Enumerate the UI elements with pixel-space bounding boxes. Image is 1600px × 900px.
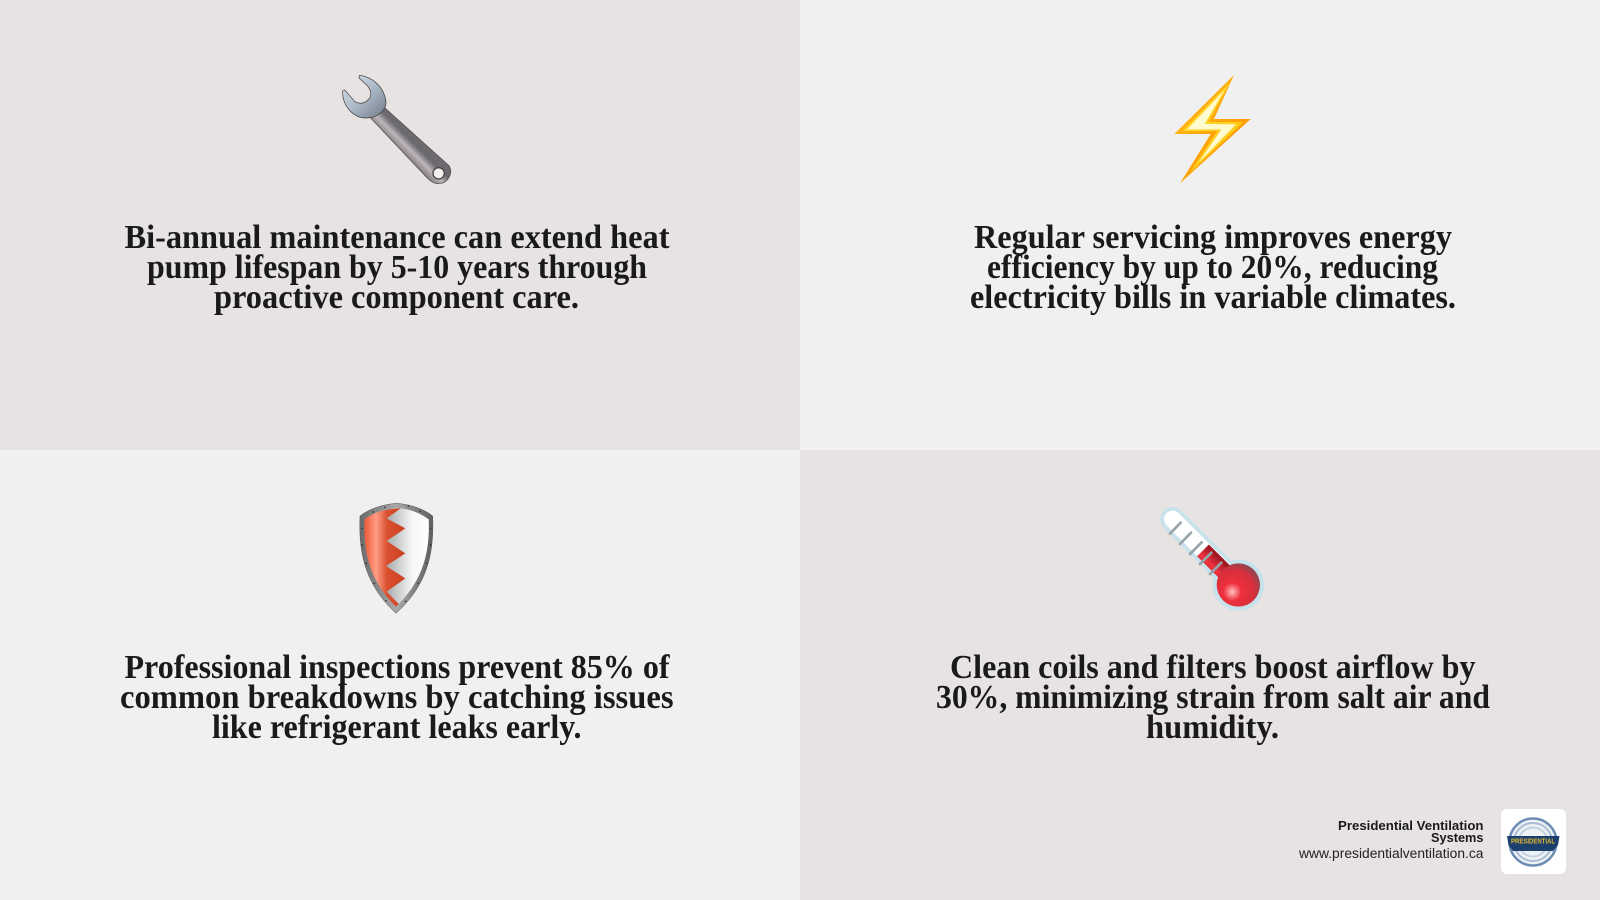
icon: shield	[360, 503, 433, 613]
logo badge: PRESIDENTIAL	[1511, 838, 1556, 846]
panel: professional inspections	[0, 450, 800, 900]
heading: professional inspections: like refrigerant leaks early.	[212, 709, 582, 746]
heading: maintenance lifespan: proactive component care.	[214, 279, 579, 316]
icon: wrench	[343, 75, 451, 184]
panel: coils and filters	[800, 450, 1600, 900]
heading: coils and filters	[936, 649, 1490, 746]
icon: lightning bolt	[1174, 75, 1251, 183]
company name: Systems	[1431, 830, 1484, 845]
heading: coils and filters: 30%, minimizing strain from salt air and	[936, 679, 1490, 716]
website url: www.presidentialventilation.ca	[1298, 846, 1484, 861]
heading: maintenance lifespan: pump lifespan by 5-10 years through	[147, 249, 647, 286]
heading: coils and filters: humidity.	[1146, 709, 1279, 746]
icon: thermometer	[1170, 519, 1264, 611]
company name	[1338, 818, 1484, 845]
heading: professional inspections: common breakdowns by catching issues	[120, 679, 674, 716]
panel: energy efficiency	[800, 0, 1600, 450]
heading: energy efficiency: efficiency by up to 20%, reducing	[987, 249, 1438, 286]
heading: energy efficiency: electricity bills in variable climates.	[970, 279, 1456, 316]
company name: Presidential Ventilation	[1338, 818, 1484, 833]
footer: company branding	[1298, 809, 1566, 874]
heading: professional inspections	[120, 649, 674, 746]
heading: maintenance lifespan: Bi-annual maintenance can extend heat	[124, 219, 670, 256]
heading: maintenance lifespan	[124, 219, 670, 316]
heading: professional inspections: Professional inspections prevent 85% of	[124, 649, 670, 686]
heading: energy efficiency: Regular servicing improves energy	[974, 219, 1452, 256]
heading: coils and filters: Clean coils and filters boost airflow by	[950, 649, 1476, 686]
panel: maintenance lifespan	[0, 0, 800, 450]
logo badge	[1501, 809, 1566, 874]
heading: energy efficiency	[970, 219, 1456, 316]
